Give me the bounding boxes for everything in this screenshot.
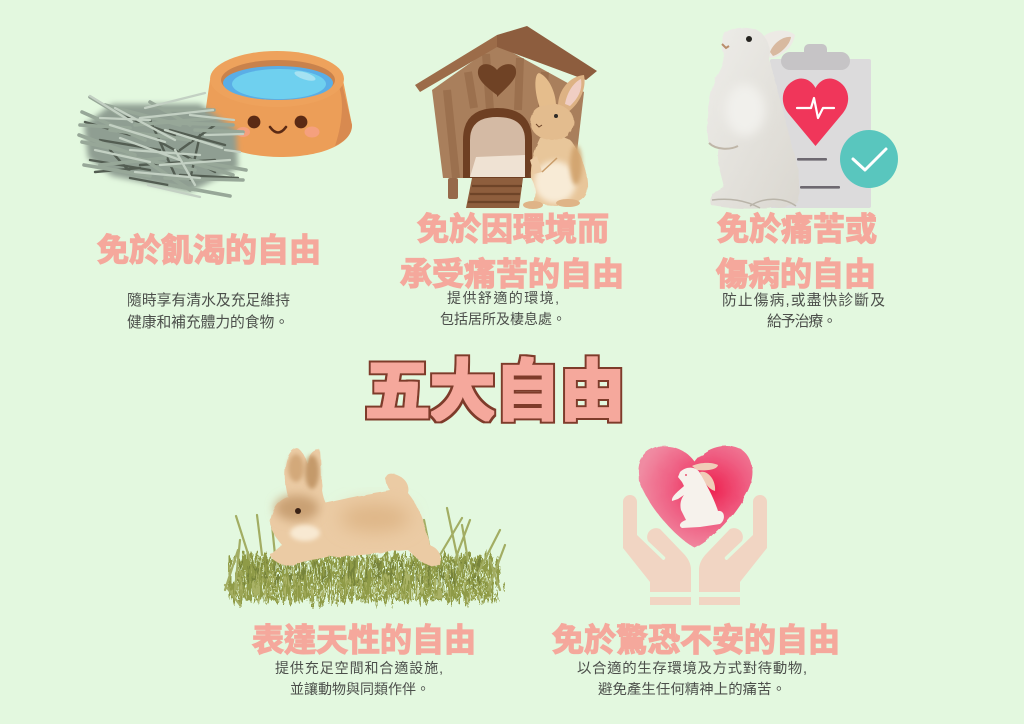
- text block: pain description: 給予治療。: [767, 313, 837, 330]
- text block: pain description: 防止傷病,或盡快診斷及: [722, 292, 885, 309]
- heading: freedom from pain: 免於痛苦或: [717, 211, 877, 247]
- text block: fear description: [577, 659, 807, 698]
- text block: hunger description: 健康和補充體力的食物。: [127, 314, 289, 331]
- panel: freedom from fear and distress: [552, 446, 840, 698]
- main title: 五大自由: [365, 354, 625, 428]
- text block: hunger description: 隨時享有清水及充足維持: [127, 292, 290, 309]
- heading: freedom from pain: 傷病的自由: [716, 256, 876, 292]
- text block: pain description: [722, 292, 885, 330]
- icon: tan rabbit: [523, 73, 588, 209]
- heading: freedom from environmental discomfort: 免於因環境而: [417, 211, 609, 247]
- icon: wooden hutch: [415, 26, 597, 208]
- heading: freedom from fear: 免於驚恐不安的自由: [552, 622, 840, 658]
- icon: white rabbit: [707, 28, 799, 209]
- text block: fear description: 避免產生任何精神上的痛苦。: [598, 681, 786, 698]
- text block: environment description: 提供舒適的環境,: [447, 290, 559, 306]
- panel: freedom to express natural behaviour: [225, 448, 505, 697]
- heading: freedom from environmental discomfort: [400, 211, 624, 292]
- text block: express description: 並讓動物與同類作伴。: [290, 681, 430, 697]
- heading: freedom from hunger: 免於飢渴的自由: [97, 232, 321, 268]
- icon: hay pile: [79, 93, 246, 197]
- text block: environment description: [440, 290, 566, 327]
- panel: freedom from hunger and thirst: [79, 51, 352, 331]
- text block: fear description: 以合適的生存環境及方式對待動物,: [577, 659, 807, 677]
- text block: hunger description: [127, 292, 290, 331]
- text block: express description: 提供充足空間和合適設施,: [275, 660, 443, 676]
- heading: freedom from environmental discomfort: 承受痛苦的自由: [400, 256, 624, 292]
- panel: freedom from discomfort: [400, 26, 624, 327]
- heading: freedom from pain: [716, 211, 877, 292]
- icon: water bowl: [203, 51, 352, 157]
- icon: rabbit on grass: [225, 448, 505, 605]
- panel: freedom from pain and disease: [707, 28, 898, 330]
- text block: express description: [275, 660, 443, 697]
- icon: medical clipboard: [770, 44, 898, 208]
- text block: environment description: 包括居所及棲息處。: [440, 311, 566, 327]
- heading: freedom to express: 表達天性的自由: [252, 622, 476, 658]
- icon: watercolour heart with rabbit: [638, 446, 753, 548]
- icon: caring hands: [623, 495, 767, 605]
